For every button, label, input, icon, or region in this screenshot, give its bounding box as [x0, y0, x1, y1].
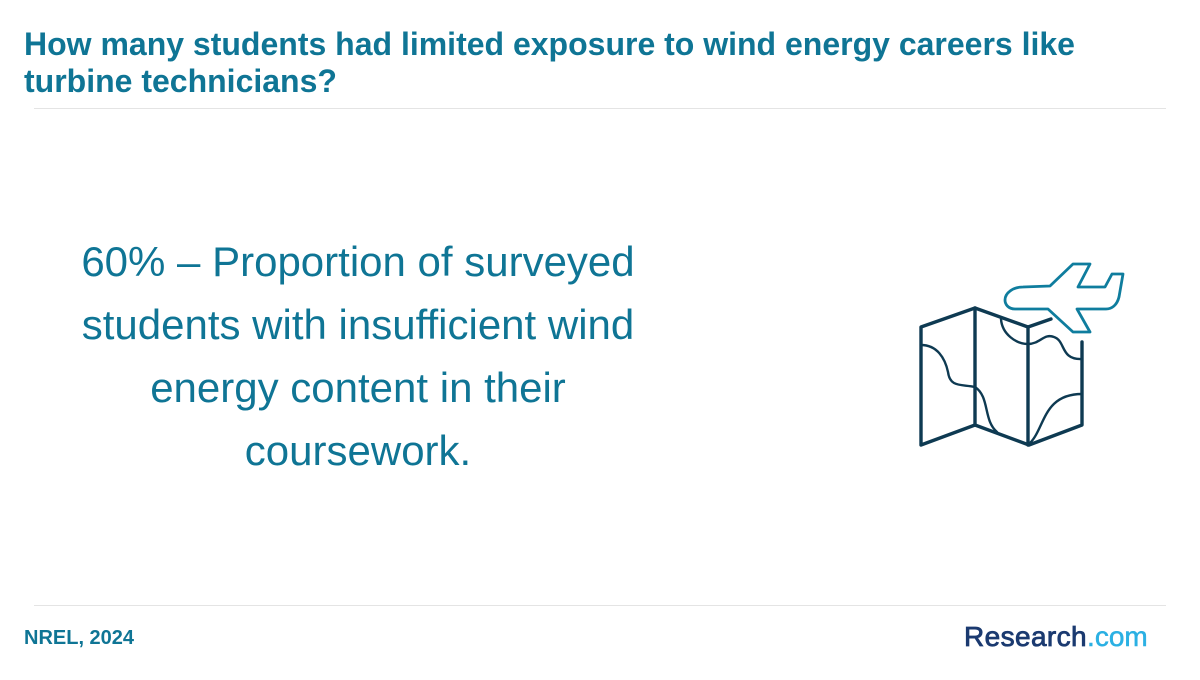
main statistic text: 60% – Proportion of surveyed [81, 238, 635, 285]
logo: Research.com [964, 621, 1148, 652]
main statistic text: students with insufficient wind [82, 301, 634, 348]
main statistic text [81, 238, 635, 474]
icon: folded map [921, 308, 1082, 445]
main statistic text: energy content in their [150, 364, 566, 411]
title: turbine technicians? [24, 63, 337, 99]
icon: map and airplane [919, 262, 1124, 447]
title [24, 26, 1075, 99]
main statistic text: coursework. [245, 427, 471, 474]
title: How many students had limited exposure to wind energy careers like [24, 26, 1075, 62]
icon: airplane [1005, 264, 1123, 332]
source: NREL, 2024 [24, 627, 134, 649]
